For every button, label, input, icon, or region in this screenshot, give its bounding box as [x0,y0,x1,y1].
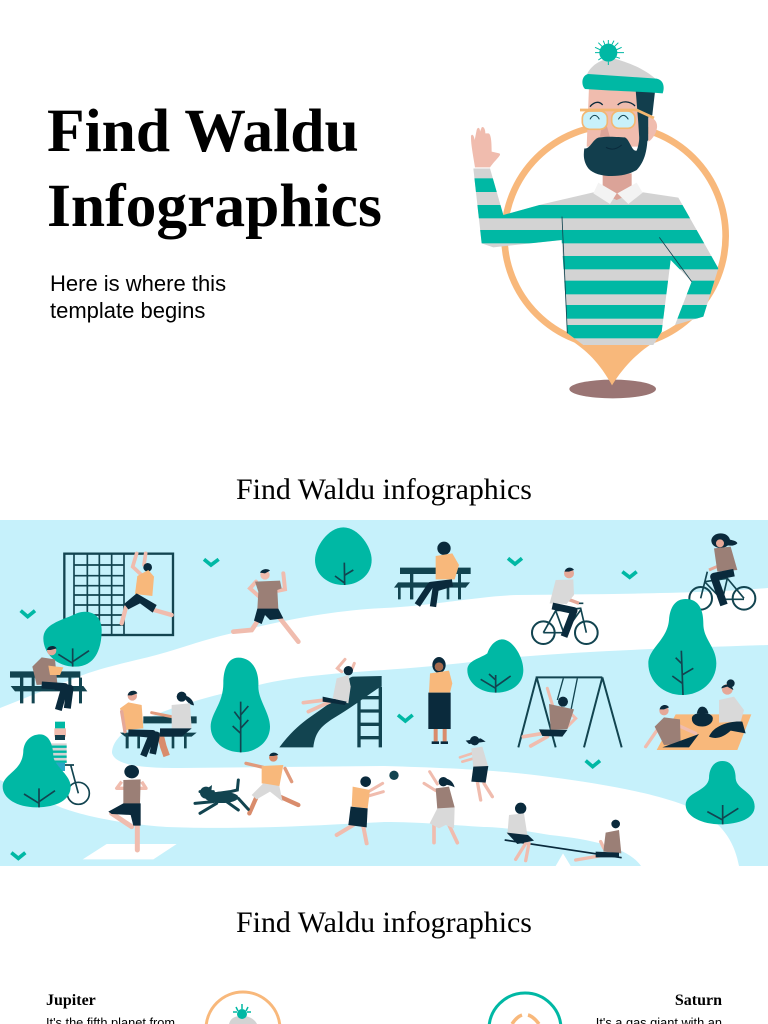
ball [389,771,399,780]
person reading on bench [10,646,87,710]
cyclist [532,568,598,644]
children on seesaw [507,803,621,861]
runner [233,569,298,642]
dog [195,780,248,813]
striped shirt [470,163,730,347]
park scene [0,520,768,866]
woman cyclist [689,533,755,610]
child throwing ball [337,776,383,843]
tree [315,527,372,585]
slide [279,676,382,747]
yoga mat [83,844,177,859]
seesaw [505,840,622,866]
heading: second section: Find Waldu infographics [236,906,532,939]
title: Find Waldu [47,97,359,165]
swing set [518,677,622,747]
tree [211,658,270,752]
runner with dog [246,753,298,813]
tree [686,761,755,824]
climber [122,553,172,623]
person on slide [303,659,354,712]
picnic couple on blanket [646,679,751,750]
right half of park [389,533,755,866]
subtitle: template begins [50,298,205,323]
Saturn heading: Saturn [675,992,722,1009]
girl with pigtails [460,736,492,800]
tree [648,599,716,695]
small Waldu on bicycle behind tree [50,722,89,804]
left half of park [3,527,383,859]
heading: first section: Find Waldu infographics [236,473,532,506]
chevron hearts [11,559,219,858]
child on swing [523,688,576,746]
glasses [580,110,654,129]
subtitle [50,271,226,323]
hat [582,40,664,93]
title [47,97,382,240]
woman on bench [394,542,471,607]
illustration: waving man in map pin [471,40,729,398]
climbing grid [64,554,173,635]
waving hand [471,127,500,167]
map pin [504,125,726,385]
subtitle: Here is where this [50,271,226,296]
couple at picnic table [120,691,197,756]
shirt fold lines [562,217,692,333]
tree [467,639,523,693]
icons: Jupiter and Saturn badges [204,990,562,1024]
Jupiter badge [206,992,280,1024]
person in yoga pose [108,765,146,850]
tree [3,734,71,807]
standing woman [428,657,452,743]
head and face [584,87,657,176]
neck and collar [593,173,643,204]
shadow [569,380,656,398]
chevron hearts [398,558,637,767]
title: Infographics [47,172,382,240]
Saturn badge [489,993,561,1024]
jumping girl [424,772,457,843]
tree [43,612,102,667]
Jupiter heading: Jupiter [46,992,96,1009]
